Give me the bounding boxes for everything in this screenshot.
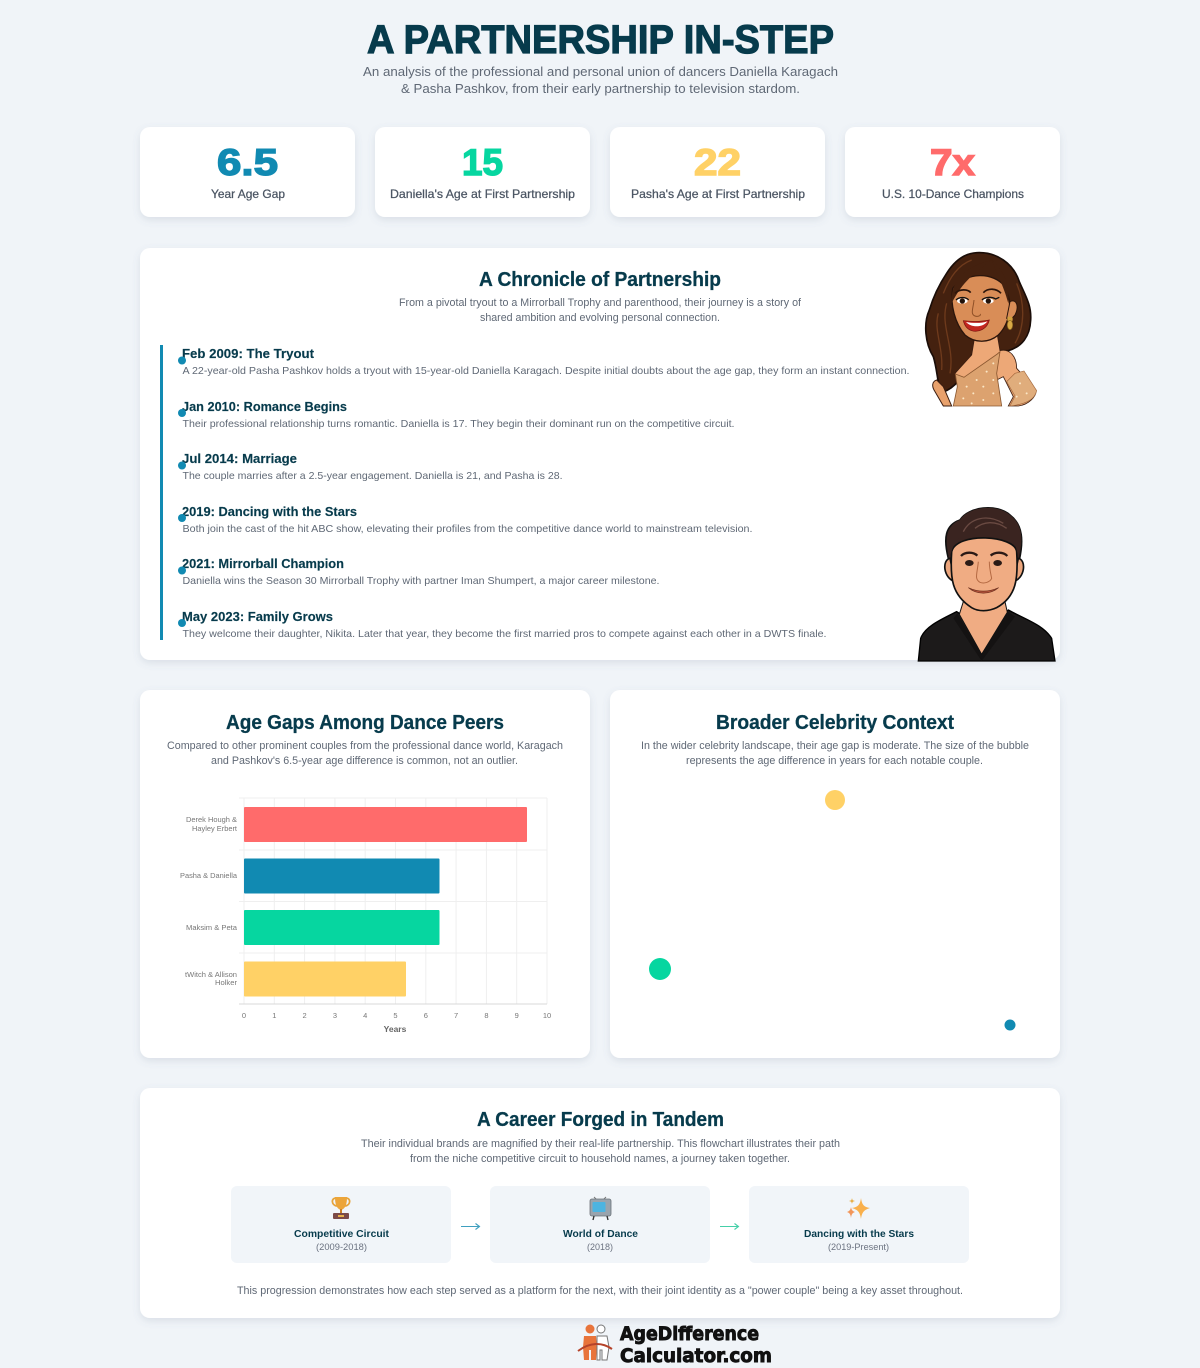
stat card: championships: 7x xyxy=(930,142,975,183)
flow step: dancing with the stars: (2019-Present) xyxy=(828,1242,889,1253)
category labels: Derek Hough & xyxy=(186,815,237,824)
timeline axis xyxy=(160,345,163,640)
bar chart xyxy=(180,798,551,1034)
timeline event: family: May 2023: Family Grows xyxy=(182,609,333,624)
stat card: Daniella's age: Daniella's Age at First Partnership xyxy=(390,187,575,201)
category labels: Hayley Erbert xyxy=(192,824,238,833)
timeline event: tryout: Feb 2009: The Tryout xyxy=(182,346,315,361)
stat card: Pasha's age: 22 xyxy=(694,142,741,183)
timeline event: dancing with the stars: Both join the cast of the hit ABC show, elevating their profiles from the competitive dance world to mainstream television. xyxy=(182,523,752,535)
x axis labels: 9 xyxy=(515,1011,519,1020)
flow step: competitive circuit: Competitive Circuit xyxy=(294,1228,389,1240)
age gaps intro text xyxy=(167,740,563,767)
heading: celebrity context: Broader Celebrity Context xyxy=(716,712,954,734)
title: A PARTNERSHIP IN-STEP xyxy=(367,18,834,62)
bubble chart xyxy=(649,790,1016,1030)
x axis labels: 10 xyxy=(543,1011,551,1020)
panel: chronicle of partnership xyxy=(140,248,1060,661)
x axis labels: 0 xyxy=(242,1011,246,1020)
heading: chronicle: A Chronicle of Partnership xyxy=(479,269,721,291)
chronicle intro text: From a pivotal tryout to a Mirrorball Trophy and parenthood, their journey is a story of xyxy=(399,297,802,309)
x axis labels xyxy=(242,1011,551,1034)
logo wordmark xyxy=(620,1323,772,1367)
timeline event: mirrorball: Daniella wins the Season 30 Mirrorball Trophy with partner Iman Shumpert, a major career milestone. xyxy=(182,575,660,587)
age gaps intro text: Compared to other prominent couples from the professional dance world, Karagach xyxy=(167,740,563,752)
x axis labels: Years xyxy=(384,1024,407,1034)
celebrity context intro text: In the wider celebrity landscape, their age gap is moderate. The size of the bubble xyxy=(641,740,1029,752)
timeline event: mirrorball xyxy=(178,556,660,587)
icon: television xyxy=(590,1197,611,1220)
category labels: tWitch & Allison xyxy=(185,970,237,979)
stat card: age gap: Year Age Gap xyxy=(211,187,285,201)
career intro text: from the niche competitive circuit to household names, a journey taken together. xyxy=(410,1153,790,1165)
career intro text xyxy=(361,1138,840,1165)
x axis labels: 8 xyxy=(484,1011,488,1020)
icon: sparkles xyxy=(847,1198,870,1219)
stat card: age gap xyxy=(140,127,355,217)
panel: age gaps among dance peers xyxy=(140,690,590,1058)
timeline event: marriage: Jul 2014: Marriage xyxy=(182,451,297,466)
x axis labels: 1 xyxy=(272,1011,276,1020)
flow step: dancing with the stars: Dancing with the Stars xyxy=(804,1228,914,1240)
x axis labels: 3 xyxy=(333,1011,337,1020)
flow step: dancing with the stars xyxy=(749,1186,969,1263)
stat card: Daniella's age xyxy=(375,127,590,217)
heading: age gaps: Age Gaps Among Dance Peers xyxy=(226,712,504,734)
x axis labels: 4 xyxy=(363,1011,367,1020)
illustration: Daniella xyxy=(926,253,1037,406)
timeline event: tryout xyxy=(178,346,910,377)
logo icon: two figures xyxy=(578,1324,612,1360)
subtitle xyxy=(363,64,838,96)
panel: career forged in tandem xyxy=(140,1088,1060,1318)
bar: Pasha and Daniella xyxy=(244,858,440,894)
career conclusion text: This progression demonstrates how each step served as a platform for the next, with their joint identity as a "power couple" being a key asset throughout. xyxy=(237,1285,963,1297)
flow step: world of dance: World of Dance xyxy=(563,1228,638,1240)
illustration: Pasha xyxy=(918,508,1055,661)
timeline event: dancing with the stars: 2019: Dancing with the Stars xyxy=(182,504,357,519)
stat card: championships xyxy=(845,127,1060,217)
timeline event: dancing with the stars xyxy=(178,504,752,535)
career intro text: Their individual brands are magnified by their real-life partnership. This flowchart illustrates their path xyxy=(361,1138,840,1150)
logo: age difference calculator xyxy=(578,1323,772,1367)
icon: trophy xyxy=(332,1197,350,1219)
category labels: Holker xyxy=(215,978,237,987)
x axis labels: 5 xyxy=(393,1011,398,1020)
flow step: competitive circuit: (2009-2018) xyxy=(316,1242,367,1253)
timeline event: tryout: A 22-year-old Pasha Pashkov holds a tryout with 15-year-old Daniella Karagach. Despite initial doubts about the age gap, they form an instant connection. xyxy=(182,365,910,377)
category labels: Pasha & Daniella xyxy=(180,871,238,880)
timeline event: family: They welcome their daughter, Nikita. Later that year, they become the first married pros to compete against each other in a DWTS finale. xyxy=(182,628,826,640)
subtitle: & Pasha Pashkov, from their early partnership to television stardom. xyxy=(401,81,800,96)
category labels xyxy=(180,815,238,987)
timeline event: marriage xyxy=(178,451,562,482)
timeline event: romance: Their professional relationship turns romantic. Daniella is 17. They begin their dominant run on the competitive circuit. xyxy=(182,418,734,430)
flow step: world of dance xyxy=(490,1186,710,1263)
celebrity context intro text xyxy=(641,740,1029,767)
stat card: Pasha's age: Pasha's Age at First Partnership xyxy=(631,187,805,201)
stat card: championships: U.S. 10-Dance Champions xyxy=(882,187,1024,201)
x axis labels: 6 xyxy=(424,1011,428,1020)
timeline event: family xyxy=(178,609,826,640)
x axis labels: 2 xyxy=(303,1011,307,1020)
subtitle: An analysis of the professional and personal union of dancers Daniella Karagach xyxy=(363,64,838,79)
timeline event: romance xyxy=(178,399,734,430)
stat card: Pasha's age xyxy=(610,127,825,217)
celebrity context intro text: represents the age difference in years for each notable couple. xyxy=(686,755,983,767)
flow step: world of dance: (2018) xyxy=(587,1242,613,1253)
timeline event: romance: Jan 2010: Romance Begins xyxy=(182,399,347,414)
stat card: Daniella's age: 15 xyxy=(462,142,503,183)
bar: Maksim and Peta xyxy=(244,910,440,945)
bar: Derek and Hayley xyxy=(244,807,527,842)
bar: tWitch and Allison xyxy=(244,962,406,996)
chronicle intro text: shared ambition and evolving personal connection. xyxy=(480,312,720,324)
stat card: age gap: 6.5 xyxy=(217,142,278,183)
age gaps intro text: and Pashkov's 6.5-year age difference is common, not an outlier. xyxy=(211,755,518,767)
flow step: competitive circuit xyxy=(231,1186,451,1263)
logo wordmark: AgeDifference xyxy=(620,1323,759,1345)
timeline event: marriage: The couple marries after a 2.5-year engagement. Daniella is 21, and Pasha is 28. xyxy=(182,470,562,482)
chronicle intro text xyxy=(399,297,802,324)
arrow: world of dance to dancing with the stars xyxy=(720,1224,738,1230)
panel: broader celebrity context xyxy=(610,690,1060,1058)
x axis labels: 7 xyxy=(454,1011,458,1020)
timeline event: mirrorball: 2021: Mirrorball Champion xyxy=(182,556,344,571)
category labels: Maksim & Peta xyxy=(186,923,238,932)
arrow: competitive circuit to world of dance xyxy=(461,1224,480,1230)
logo wordmark: Calculator.com xyxy=(620,1345,772,1367)
heading: career: A Career Forged in Tandem xyxy=(477,1109,724,1131)
